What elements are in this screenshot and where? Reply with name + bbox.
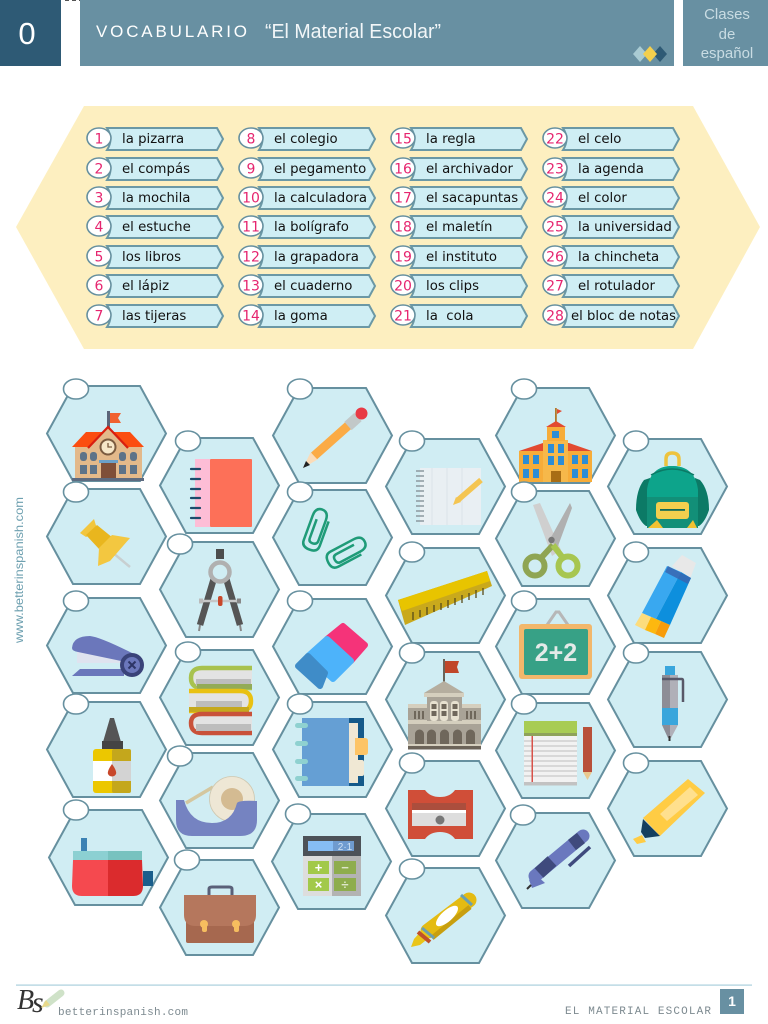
vocabulary item 23: 23	[546, 162, 564, 178]
vocabulary item 20: 20	[394, 278, 412, 294]
vocabulary item 11: 11	[242, 220, 260, 236]
vocabulary item 6	[87, 275, 223, 297]
hexagon: blackboard: 2+2	[535, 639, 577, 667]
vocabulary item 18	[391, 216, 527, 238]
vocabulary item 20: los clips	[426, 279, 479, 294]
hexagon: spiral notebook	[160, 431, 279, 533]
vocabulary item 23: la agenda	[578, 162, 644, 177]
hexagon: highlighter	[608, 753, 727, 856]
header: title bar	[80, 0, 674, 66]
vocabulary item 24: el color	[578, 191, 627, 206]
footer: logo with pencil: betterinspanish.com	[58, 1007, 188, 1019]
hexagon: calculator: −	[341, 860, 349, 875]
vocabulary item 15: la regla	[426, 132, 476, 147]
vocabulary item 24: 24	[546, 190, 564, 206]
vocabulary item 6: 6	[95, 278, 104, 294]
vocabulary item 27: 27	[546, 278, 564, 294]
vocabulary item 9: el pegamento	[274, 162, 366, 177]
vocabulary item 13: 13	[242, 278, 260, 294]
vocabulary item 19	[391, 246, 527, 268]
hexagon: calculator: ×	[315, 877, 323, 892]
vocabulary item 8	[239, 128, 375, 150]
vocabulary item 12	[239, 246, 375, 268]
vocabulary item 28	[543, 305, 679, 327]
vocabulary item 25: 25	[546, 220, 564, 236]
hexagon: blackboard	[496, 591, 615, 694]
vocabulary item 3	[87, 187, 223, 209]
vocabulary item 10: la calculadora	[274, 191, 367, 206]
vocabulary item 5	[87, 246, 223, 268]
footer: page number	[720, 989, 744, 1014]
hexagon: glue bottle	[47, 694, 166, 797]
vocabulary item 18: el maletín	[426, 219, 492, 235]
hexagon: paper clips	[273, 482, 392, 585]
footer rule	[16, 984, 752, 986]
footer: logo with pencil: B	[17, 985, 34, 1016]
vocabulary item 22: 22	[546, 132, 564, 148]
hexagon: old school building	[47, 379, 166, 481]
vocabulary item 26: 26	[546, 250, 564, 266]
vocabulary item 25	[543, 216, 679, 238]
hexagon: spiral notepad	[386, 431, 505, 534]
vocabulary item 26	[543, 246, 679, 268]
vocabulary item 17	[391, 187, 527, 209]
vocabulary item 12: la grapadora	[274, 250, 359, 265]
vocabulary item 4: el estuche	[122, 220, 191, 235]
hexagon: tape dispenser	[160, 746, 279, 848]
vocabulary item 21: 21	[394, 308, 412, 324]
vocabulary item 9: 9	[247, 162, 255, 178]
vocabulary item 3: la mochila	[122, 191, 190, 206]
vocabulary item 8: 8	[247, 132, 255, 148]
hexagon: calculator: +	[315, 860, 323, 875]
vocabulary item 19: el instituto	[426, 250, 497, 265]
hexagon: crayon	[386, 859, 505, 963]
hexagon: stack of books	[160, 642, 279, 745]
vocabulary item 22	[543, 128, 679, 150]
side url: www.betterinspanish.com	[12, 497, 26, 644]
header: Clases de español box	[683, 0, 768, 66]
vocabulary item 7	[87, 305, 223, 327]
vocabulary item 13: el cuaderno	[274, 279, 352, 294]
header: Clases de español box: español	[701, 45, 753, 62]
vocabulary item 17: 17	[394, 190, 412, 206]
header: Clases de español box: de	[719, 26, 735, 43]
hexagon: calculator: 2·1	[338, 842, 353, 853]
vocabulary item 24	[543, 187, 679, 209]
hexagon: ruler	[386, 542, 505, 643]
vocabulary item 12: 12	[242, 250, 260, 266]
hexagon: pencil	[273, 379, 392, 483]
vocabulary item 7: 7	[95, 308, 103, 324]
header: Clases de español box: Clases	[704, 6, 750, 23]
vocabulary item 10: 10	[242, 190, 260, 206]
vocabulary item 21: la cola	[426, 309, 474, 324]
header: title bar: VOCABULARIO	[96, 22, 247, 41]
hexagon: calculator: ÷	[341, 877, 349, 892]
hexagon: ballpoint pen	[496, 805, 615, 908]
vocabulary item 11: la bolígrafo	[274, 219, 349, 235]
vocabulary item 15: 15	[394, 132, 412, 148]
vocabulary item 13	[239, 275, 375, 297]
vocabulary item 6: el lápiz	[122, 278, 169, 294]
hexagon: backpack	[608, 431, 727, 534]
vocabulary item 3: 3	[95, 190, 103, 206]
vocabulary item 8: el colegio	[274, 132, 338, 147]
vocabulary item 25: la universidad	[578, 220, 672, 235]
vocabulary item 2: el compás	[122, 161, 190, 177]
vocabulary item 26: la chincheta	[578, 250, 659, 265]
hexagon: briefcase	[160, 850, 279, 955]
vocabulary item 27: el rotulador	[578, 279, 655, 294]
hexagon: glue stick	[608, 542, 727, 643]
vocabulary item 28: 28	[546, 308, 564, 324]
footer: page number: 1	[728, 993, 736, 1009]
vocabulary item 4: 4	[95, 220, 104, 236]
header: unit number box	[0, 0, 61, 66]
header: title bar: “El Material Escolar”	[265, 21, 441, 43]
vocabulary item 7: las tijeras	[122, 309, 186, 324]
footer: page title: EL MATERIAL ESCOLAR	[565, 1006, 711, 1018]
vocabulary item 16: el archivador	[426, 162, 513, 177]
vocabulary panel	[16, 106, 760, 349]
hexagon: compass	[160, 534, 279, 637]
vocabulary item 5: los libros	[122, 250, 181, 265]
hexagon: institute building	[386, 643, 505, 750]
vocabulary item 18: 18	[394, 220, 412, 236]
vocabulary item 22: el celo	[578, 132, 621, 147]
vocabulary item 14: la goma	[274, 309, 328, 324]
hexagon: calculator	[272, 804, 391, 909]
vocabulary item 28: el bloc de notas	[571, 309, 676, 324]
hexagon: mechanical pen	[608, 643, 727, 747]
vocabulary item 1	[87, 128, 223, 150]
vocabulary item 1: 1	[95, 132, 103, 148]
vocabulary item 1: la pizarra	[122, 132, 184, 147]
hexagon: lined paper and red pencil	[496, 694, 615, 798]
header: unit number box: 0	[18, 16, 36, 51]
vocabulary item 17: el sacapuntas	[426, 191, 518, 206]
hexagon: pencil sharpener	[386, 753, 505, 856]
footer: logo with pencil	[17, 985, 188, 1019]
vocabulary item 10	[239, 187, 375, 209]
vocabulary item 16: 16	[394, 162, 412, 178]
vocabulary item 21	[391, 305, 527, 327]
vocabulary item 4	[87, 216, 223, 238]
vocabulary item 15	[391, 128, 527, 150]
hexagon: stapler	[47, 591, 166, 693]
vocabulary item 2	[87, 158, 223, 180]
vocabulary item 11	[239, 216, 375, 238]
hexagon: push pin	[47, 482, 166, 584]
hexagon: yellow university building	[496, 379, 615, 483]
hexagon: agenda	[273, 694, 392, 797]
hexagon: scissors	[496, 482, 615, 586]
hexagon: eraser	[273, 591, 392, 694]
vocabulary item 2: 2	[95, 162, 103, 178]
vocabulary item 5: 5	[95, 250, 103, 266]
vocabulary item 14: 14	[242, 308, 260, 324]
vocabulary item 16	[391, 158, 527, 180]
vocabulary item 23	[543, 158, 679, 180]
hexagon: pencil case	[49, 800, 168, 905]
vocabulary item 9	[239, 158, 375, 180]
footer: logo with pencil: s	[32, 986, 44, 1019]
vocabulary item 14	[239, 305, 375, 327]
vocabulary item 19: 19	[394, 250, 412, 266]
vocabulary item 27	[543, 275, 679, 297]
vocabulary item 20	[391, 275, 527, 297]
